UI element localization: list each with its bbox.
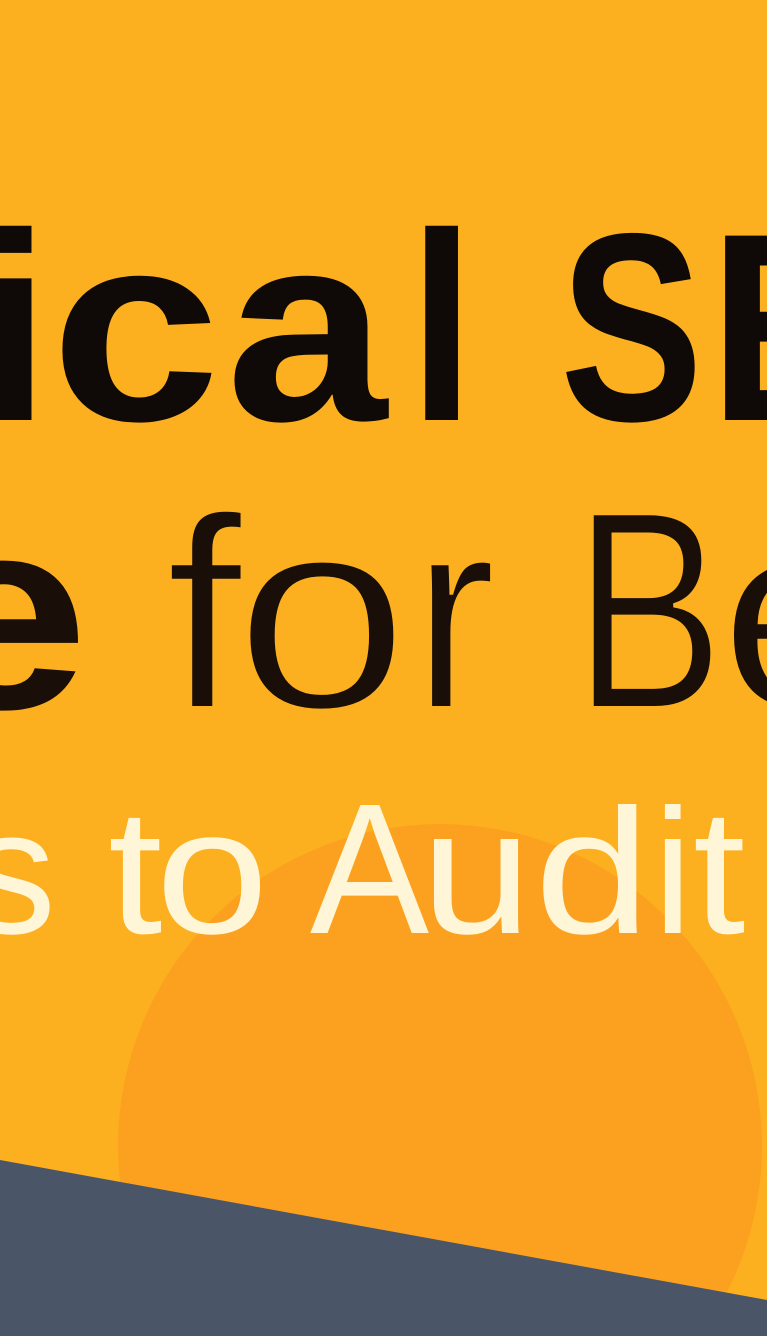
title line 2: B (574, 453, 724, 769)
title line 2: r (413, 460, 496, 767)
decorative orange circle (118, 824, 762, 1336)
subtitle: t (108, 772, 162, 971)
title line 1: a (226, 179, 389, 478)
subtitle: o (156, 773, 269, 971)
title line 1: c (50, 178, 220, 477)
subtitle: i (653, 772, 693, 971)
subtitle: A (310, 765, 429, 973)
subtitle (0, 765, 745, 973)
title line 1 (0, 177, 767, 478)
title line 2 (0, 453, 767, 769)
title line 1: S (560, 178, 703, 477)
title line 1: l (409, 177, 475, 477)
dark slate wedge (0, 1160, 767, 1336)
subtitle: u (421, 773, 532, 972)
subtitle: d (534, 773, 650, 972)
title line 2: f (166, 461, 243, 767)
title line 2: o (235, 461, 409, 767)
subtitle: t (693, 772, 745, 971)
